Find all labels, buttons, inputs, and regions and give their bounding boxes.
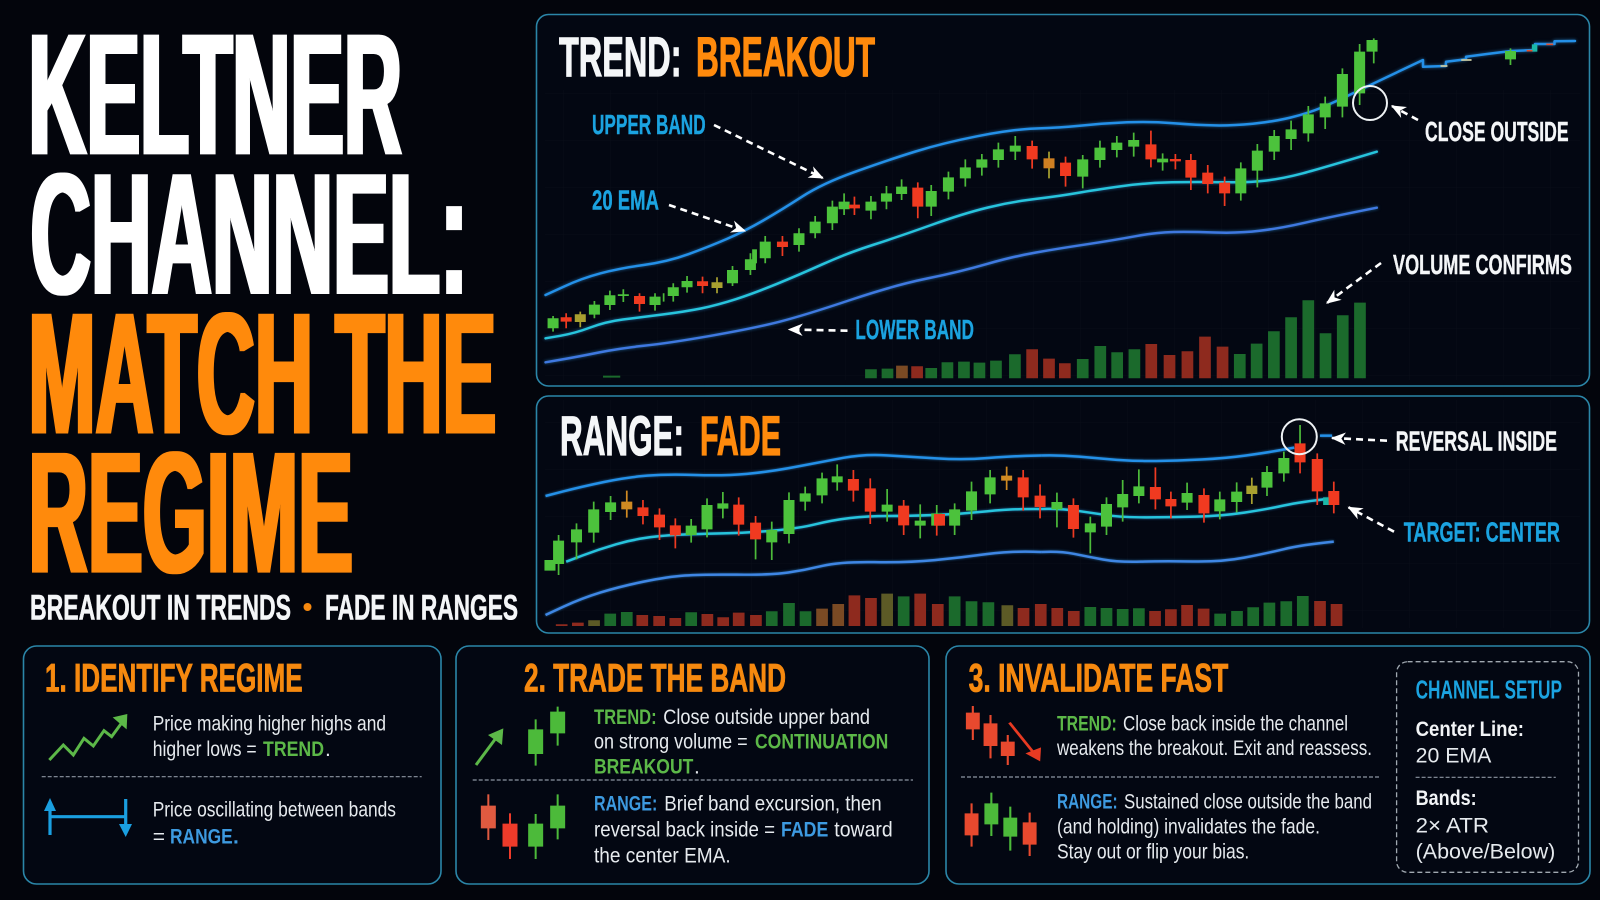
range volume bars <box>562 594 1337 626</box>
trend candles right <box>1083 38 1553 206</box>
text: trend description: higher lows = <box>153 738 257 761</box>
heading: invalidate fast: 3. INVALIDATE FAST <box>969 657 1228 701</box>
text: range invalidation: Sustained close outside the band <box>1124 790 1372 813</box>
text: trend rule: Close outside upper band <box>663 706 870 729</box>
panel: trade the band <box>456 646 929 884</box>
subtitle: FADE IN RANGES <box>325 588 518 628</box>
title: CHANNEL: <box>30 136 468 331</box>
callout: channel setup: Bands: <box>1416 787 1477 810</box>
upper band line <box>546 41 1575 295</box>
text: range description: = <box>153 825 165 848</box>
text: trend description <box>153 713 386 761</box>
text: range rule: Brief band excursion, then <box>664 793 882 816</box>
lower band line <box>546 208 1377 362</box>
callout: close outside <box>1353 86 1569 147</box>
text: trend rule: BREAKOUT <box>594 755 693 778</box>
text: range rule: FADE <box>781 819 828 842</box>
trend volume bars <box>603 300 1360 378</box>
text: range rule: reversal back inside = <box>594 819 775 842</box>
title: KELTNER <box>28 0 402 191</box>
text: range rule: RANGE: <box>594 793 657 816</box>
text: range rule: the center EMA. <box>594 845 731 868</box>
text: range description: Price oscillating between bands <box>153 799 396 822</box>
heading: range fade: RANGE: <box>560 405 684 467</box>
callout: channel setup: 20 EMA <box>1416 745 1491 768</box>
text: trend invalidation <box>1056 713 1372 760</box>
heading: trend breakout: BREAKOUT <box>696 26 875 88</box>
text: trend rule: TREND: <box>594 706 657 729</box>
text: trend rule: on strong volume = <box>594 730 748 753</box>
text: range description <box>153 799 396 848</box>
label: 20 EMA: 20 EMA <box>592 185 659 216</box>
panel: trend breakout <box>536 14 1590 386</box>
icon: fade candles <box>488 794 558 859</box>
heading: trend breakout: TREND: <box>559 26 682 88</box>
range bands left <box>545 455 1041 615</box>
range candles left <box>550 464 1057 575</box>
text: trend description: . <box>325 738 331 761</box>
text: trend rule <box>594 706 888 778</box>
label: 20 EMA <box>592 185 745 231</box>
text: MATCH THE <box>28 276 496 470</box>
callout: channel setup: Center Line: <box>1416 718 1524 741</box>
text: trend description: Price making higher highs and <box>153 713 386 736</box>
icon: breakout arrow and candles <box>476 707 558 766</box>
text: range invalidation: (and holding) invalidates the fade. <box>1057 815 1320 838</box>
title: REGIME <box>28 415 353 610</box>
title <box>28 0 496 610</box>
text: range invalidation: Stay out or flip your bias. <box>1057 840 1249 863</box>
panel: invalidate fast <box>946 646 1590 884</box>
label: lower band: LOWER BAND <box>855 314 974 345</box>
center EMA line <box>546 152 1377 338</box>
callout: target center <box>1349 507 1560 548</box>
icon: rising trend arrow <box>49 714 127 760</box>
text: range description: RANGE <box>170 825 233 848</box>
trend candles left <box>553 136 1066 332</box>
text: trend invalidation: Close back inside the channel <box>1123 713 1348 736</box>
text: trend rule: . <box>694 755 700 778</box>
range bands right <box>1041 436 1334 562</box>
callout: channel setup <box>1397 662 1578 872</box>
heading: identify regime: 1. IDENTIFY REGIME <box>45 657 303 701</box>
label: upper band <box>592 109 823 178</box>
callout: reversal inside <box>1282 419 1557 457</box>
label: upper band: UPPER BAND <box>592 109 706 140</box>
text: range description: . <box>233 825 239 848</box>
text: range invalidation: RANGE: <box>1057 790 1118 813</box>
text: trend invalidation: TREND: <box>1057 713 1117 736</box>
heading: trade the band: 2. TRADE THE BAND <box>524 657 786 701</box>
text: trend description: TREND <box>263 738 324 761</box>
callout: channel setup: (Above/Below) <box>1416 840 1555 863</box>
text: trend invalidation: weakens the breakout. Exit and reassess. <box>1056 737 1372 760</box>
icon: mixed candles <box>972 793 1030 856</box>
panel: range fade <box>536 396 1590 633</box>
callout: channel setup: 2× ATR <box>1416 815 1489 838</box>
icon: falling candles and arrow <box>973 706 1041 765</box>
text: range invalidation <box>1057 790 1372 863</box>
text: trend rule: CONTINUATION <box>755 730 888 753</box>
subtitle: BREAKOUT IN TRENDS <box>30 588 291 628</box>
panel: identify regime <box>24 646 441 884</box>
icon: range arrows <box>44 798 132 837</box>
heading: trend breakout <box>559 26 875 88</box>
text: range rule <box>594 793 893 868</box>
callout: volume confirms <box>1327 249 1572 303</box>
range candles right <box>1073 425 1334 553</box>
text: range rule: toward <box>834 819 893 842</box>
heading: range fade: FADE <box>700 405 781 467</box>
